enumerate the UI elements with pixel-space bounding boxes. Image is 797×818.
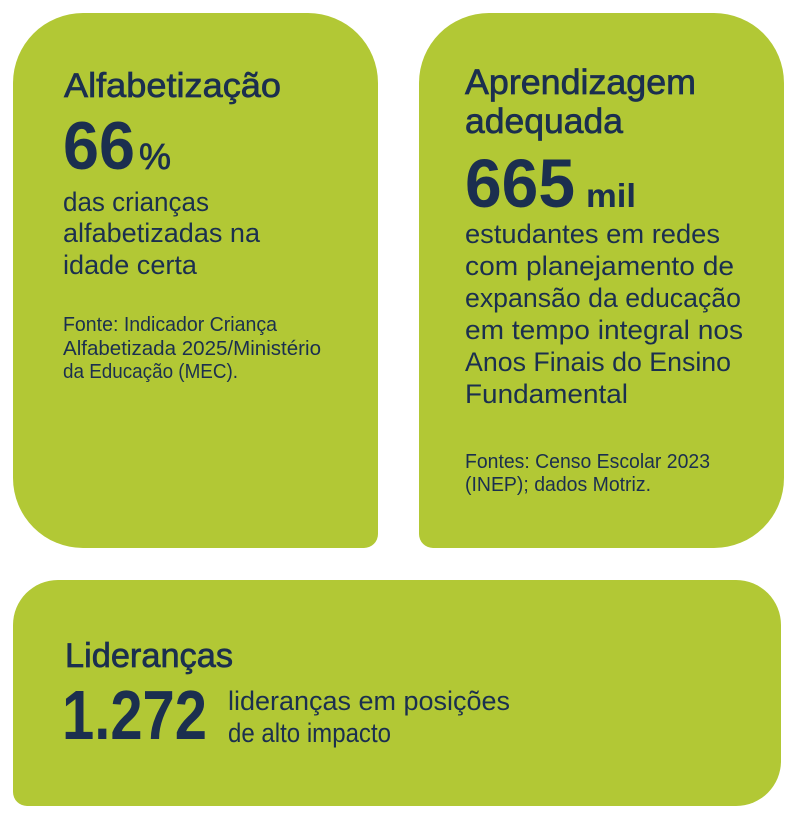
description: de alto impacto	[228, 718, 391, 748]
stat: 665 mil	[465, 145, 636, 222]
panel background	[13, 580, 781, 806]
heading: Aprendizagem	[465, 63, 696, 102]
panel background	[419, 13, 784, 548]
stat: 1.272: 1.272	[62, 676, 207, 754]
stat: 665 mil: 665	[465, 145, 575, 222]
source: (INEP); dados Motriz.	[465, 474, 651, 496]
description: Anos Finais do Ensino	[465, 347, 731, 377]
stat: 66%: 66	[63, 108, 135, 184]
panel: Aprendizagem adequada	[419, 13, 784, 548]
heading: Lideranças	[65, 637, 233, 675]
description: alfabetizadas na	[63, 218, 261, 248]
heading	[465, 63, 696, 141]
description: com planejamento de	[465, 251, 734, 281]
description: idade certa	[63, 250, 198, 280]
source: Fontes: Censo Escolar 2023	[465, 451, 710, 473]
source	[63, 314, 321, 383]
stat: 665 mil: mil	[586, 177, 636, 214]
description	[63, 187, 261, 280]
panel: Lideranças	[13, 580, 781, 806]
source	[465, 451, 710, 496]
description: das crianças	[63, 187, 209, 217]
heading: adequada	[465, 102, 624, 141]
description: Fundamental	[465, 379, 628, 409]
source: Alfabetizada 2025/Ministério	[63, 338, 321, 360]
description: em tempo integral nos	[465, 315, 743, 345]
description	[228, 686, 510, 748]
panel: Alfabetização	[13, 13, 378, 548]
source: da Educação (MEC).	[63, 361, 238, 383]
description: expansão da educação	[465, 283, 741, 313]
source: Fonte: Indicador Criança	[63, 314, 278, 336]
description	[465, 219, 743, 409]
description: estudantes em redes	[465, 219, 720, 249]
description: lideranças em posições	[228, 686, 510, 716]
heading: Alfabetização	[64, 67, 281, 105]
panel background	[13, 13, 378, 548]
stat: 66%: %	[139, 136, 171, 177]
